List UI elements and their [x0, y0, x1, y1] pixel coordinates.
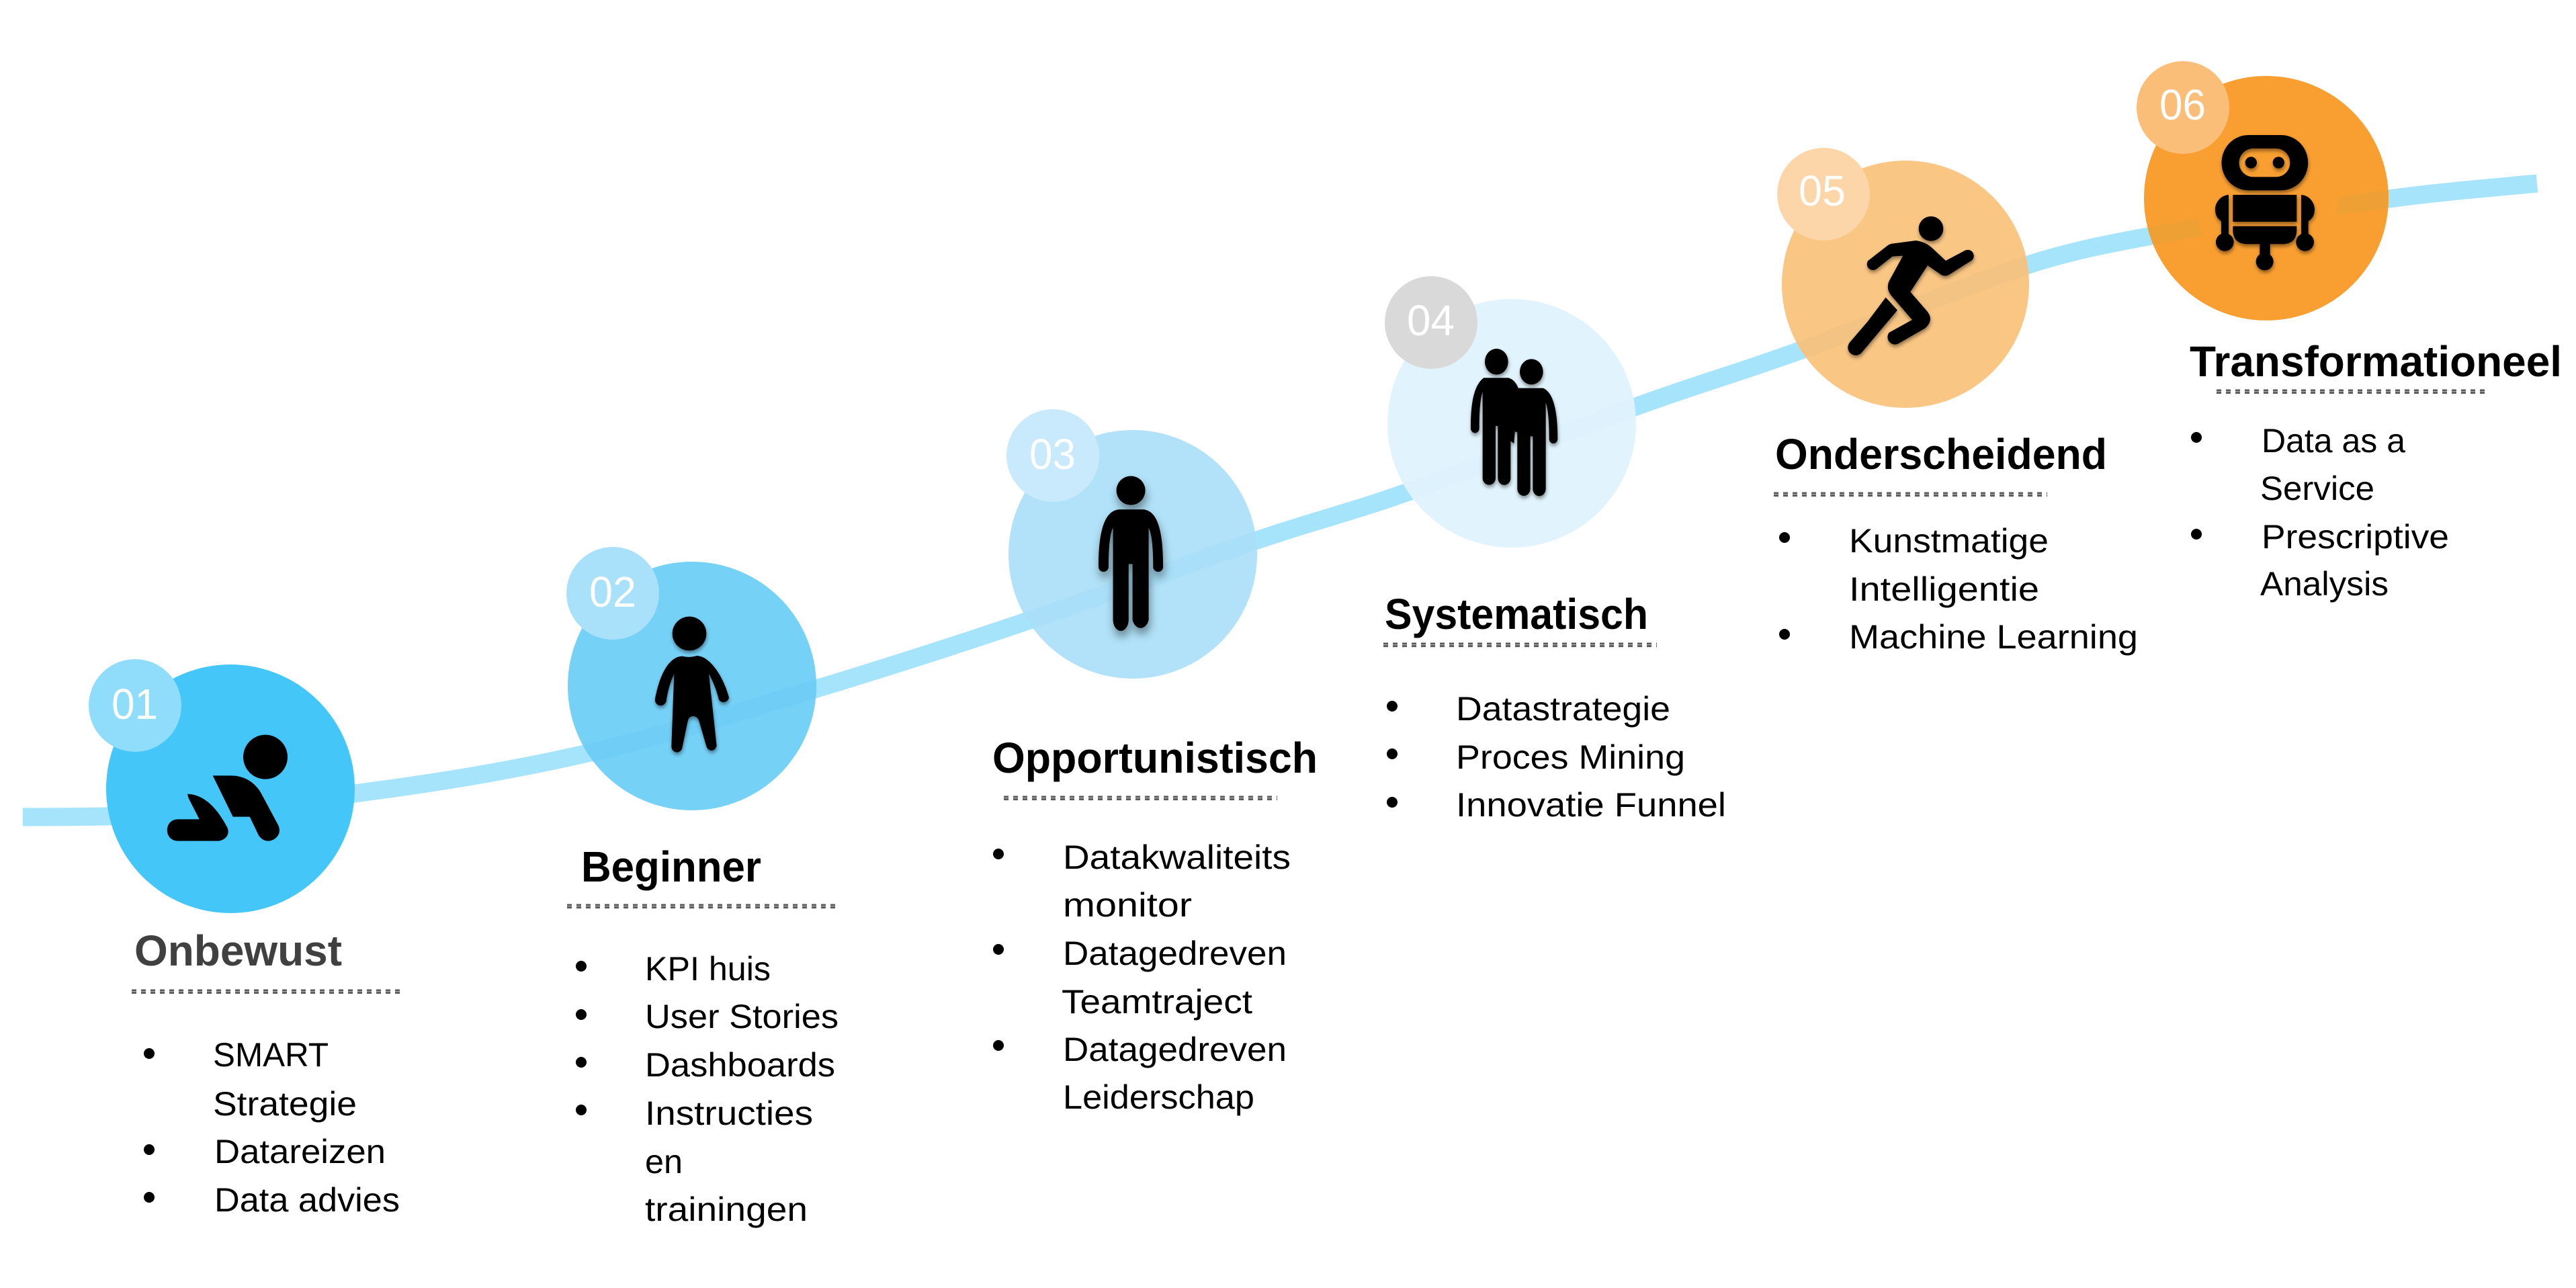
journey curve [23, 183, 2537, 817]
step 05: Onderscheidend [1774, 148, 2135, 656]
icon: robot [2215, 135, 2315, 270]
badge 01: 01 [112, 680, 158, 728]
list 04: Datastrategie [1456, 690, 1670, 728]
list 03 [993, 839, 1291, 1116]
divider 04 [1383, 644, 1657, 646]
step 04: Systematisch [1383, 276, 1724, 817]
heading: Onderscheidend: Onderscheidend [1775, 430, 2107, 478]
badge 01 [89, 659, 181, 752]
list 01: Datareizen [214, 1133, 386, 1170]
list 06: Analysis [2260, 565, 2389, 603]
list 02: Instructies [645, 1094, 813, 1132]
badge 05 [1777, 148, 1870, 241]
icon: two people [1471, 349, 1557, 496]
badge 03 [1006, 409, 1099, 502]
step 02: Beginner [566, 547, 837, 1228]
list 04: Innovatie Funnel [1456, 786, 1726, 824]
list 05: Kunstmatige [1849, 522, 2049, 560]
list 02: Dashboards [645, 1046, 835, 1084]
list 02: trainingen [645, 1191, 808, 1228]
badge 06 [2137, 61, 2229, 154]
list 06: Service [2260, 470, 2374, 507]
list 01 [144, 1036, 400, 1219]
heading: Beginner: Beginner [581, 843, 761, 891]
circle 03 [1008, 430, 1257, 679]
circle 01 [106, 664, 355, 913]
step 03: Opportunistisch [993, 409, 1316, 1115]
divider 06 [2217, 390, 2489, 393]
badge 02 [566, 547, 659, 640]
step 06: Transformationeel [2137, 61, 2559, 602]
heading: Transformationeel: Transformationeel [2190, 337, 2562, 386]
badge 04 [1385, 276, 1477, 369]
badge 05: 05 [1799, 167, 1846, 215]
list 02: KPI huis [645, 950, 771, 988]
divider 02 [567, 905, 840, 908]
icon: child [655, 617, 729, 753]
list 03: Datakwaliteits [1063, 839, 1291, 876]
heading: Opportunistisch: Opportunistisch [992, 734, 1318, 782]
list 04 [1387, 690, 1726, 824]
list 03: Teamtraject [1062, 983, 1252, 1021]
list 02: en [645, 1143, 683, 1180]
badge 06: 06 [2159, 81, 2206, 129]
circle 02 [568, 562, 816, 810]
list 05: Intelligentie [1849, 570, 2039, 608]
list 02 [576, 950, 839, 1228]
heading: Onbewust: Onbewust [134, 927, 342, 975]
list 03: Datagedreven [1063, 1031, 1287, 1068]
circle 06 [2144, 76, 2389, 320]
list 04: Proces Mining [1456, 738, 1685, 776]
list 01: SMART [213, 1036, 329, 1074]
badge 04: 04 [1407, 296, 1455, 345]
icon: adult [1099, 476, 1163, 631]
list 05: Machine Learning [1849, 618, 2138, 656]
list 02: User Stories [645, 998, 839, 1035]
list 03: Leiderschap [1063, 1078, 1254, 1116]
list 06: Prescriptive [2262, 518, 2449, 556]
list 01: Data advies [214, 1181, 400, 1219]
icon: runner [1848, 216, 1974, 355]
list 06: Data as a [2262, 422, 2405, 460]
circle 04 [1387, 299, 1636, 548]
badge 03: 03 [1029, 430, 1076, 478]
icon: crawling baby [167, 735, 288, 841]
badge 02: 02 [589, 568, 636, 616]
divider 01 [132, 990, 404, 993]
divider 05 [1774, 493, 2047, 496]
list 05 [1779, 522, 2138, 656]
list 01: Strategie [213, 1085, 357, 1123]
heading: Systematisch: Systematisch [1385, 590, 1648, 638]
step 01: Onbewust [89, 659, 404, 1219]
list 03: Datagedreven [1063, 935, 1287, 972]
list 03: monitor [1063, 886, 1192, 924]
list 06 [2191, 422, 2449, 603]
divider 03 [1004, 797, 1277, 800]
circle 05 [1782, 161, 2029, 408]
